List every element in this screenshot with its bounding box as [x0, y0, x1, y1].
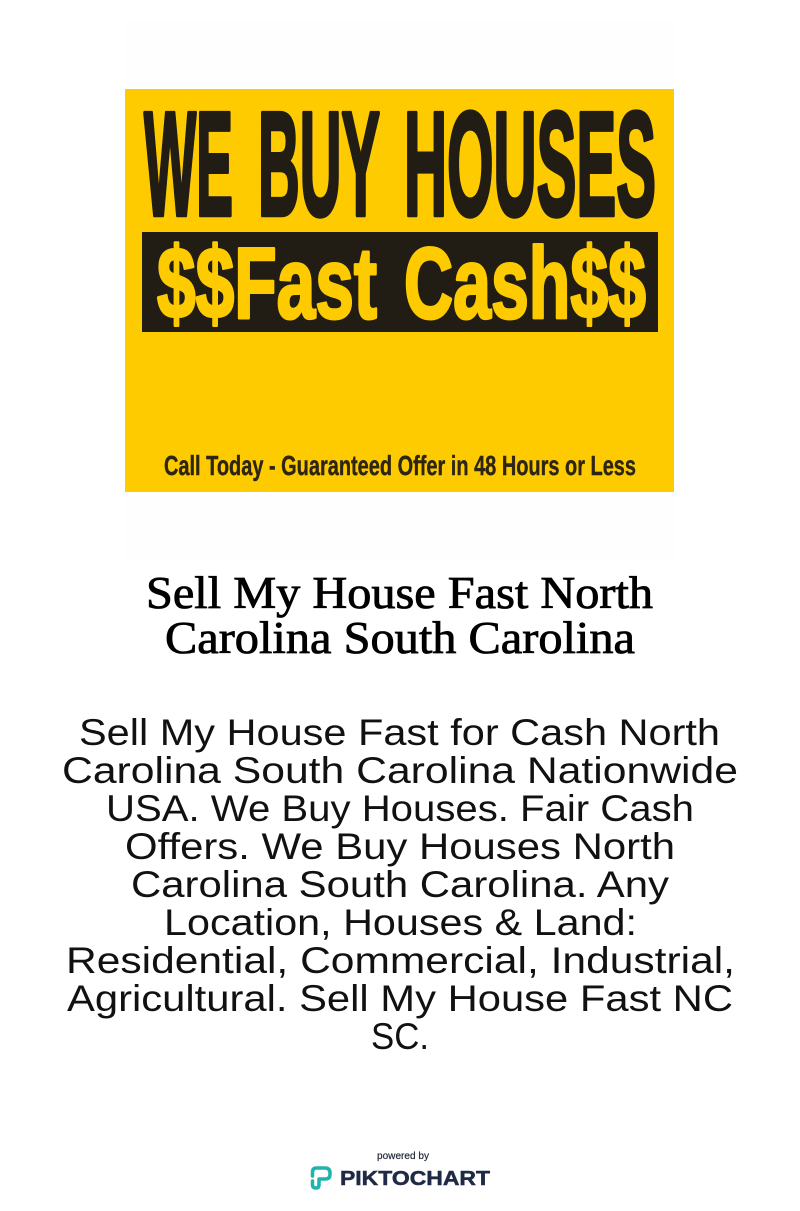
- Piktochart wordmark: PIKTOCHART: [340, 1168, 490, 1190]
- body text block: Sell My House Fast for Cash North: [79, 712, 720, 753]
- body text block: Carolina South Carolina. Any: [131, 864, 670, 905]
- body text block: Residential, Commercial, Industrial,: [66, 940, 735, 981]
- body text block: Agricultural. Sell My House Fast NC: [67, 978, 733, 1019]
- black banner: fast cash: Cash$$: [404, 228, 646, 340]
- sign heading: we buy houses: WE: [144, 82, 233, 247]
- body text block: Offers. We Buy Houses North: [125, 826, 675, 867]
- icon: Piktochart logo: [312, 1168, 330, 1188]
- footer: powered by Piktochart: [312, 1151, 490, 1190]
- black banner: fast cash: [142, 228, 658, 340]
- body text block: USA. We Buy Houses. Fair Cash: [106, 788, 694, 829]
- body text block: Location, Houses & Land:: [164, 902, 637, 943]
- sign heading: we buy houses: BUY: [258, 82, 380, 247]
- sign heading: we buy houses: [144, 82, 656, 247]
- body text block: SC.: [371, 1016, 429, 1057]
- title: Sell My House Fast North: [146, 568, 653, 618]
- powered by label: powered by: [377, 1151, 429, 1162]
- body text block: [62, 712, 738, 1057]
- black banner: fast cash: $$Fast: [157, 228, 377, 340]
- panel: yellow We Buy Houses sign: [125, 82, 674, 492]
- sign background: [125, 89, 674, 492]
- body text block: Carolina South Carolina Nationwide: [62, 750, 738, 791]
- title: Carolina South Carolina: [165, 613, 635, 663]
- title: [146, 568, 653, 663]
